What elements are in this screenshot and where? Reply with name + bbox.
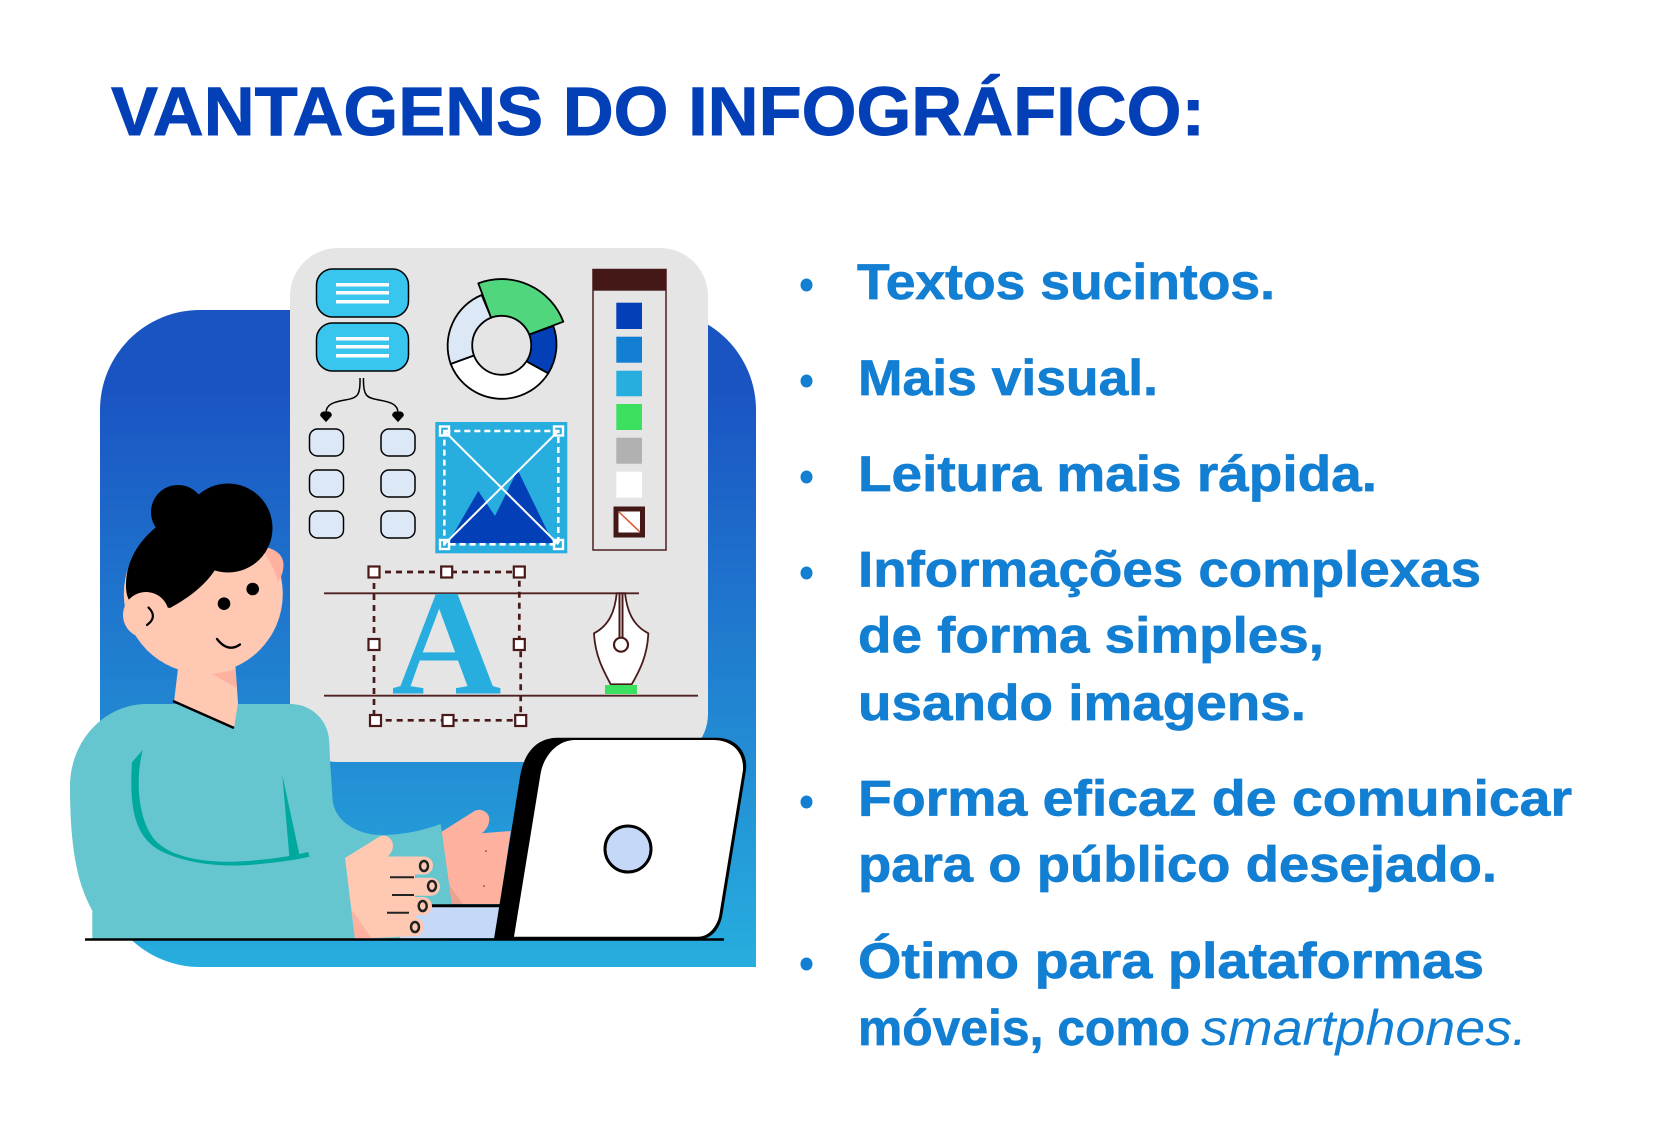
smile xyxy=(217,639,240,648)
item: informacoes complexas: Informações complexas xyxy=(858,542,1481,598)
collar xyxy=(173,701,234,728)
title: VANTAGENS DO INFOGRÁFICO: xyxy=(111,73,1205,150)
flow boxes xyxy=(310,429,415,538)
item: textos sucintos: Textos sucintos. xyxy=(857,254,1275,310)
sweater folds xyxy=(131,750,309,866)
image placeholder xyxy=(435,422,567,553)
item: otimo para plataformas xyxy=(800,933,1527,1056)
item: otimo para plataformas: Ótimo para plataformas xyxy=(858,933,1484,989)
text cards xyxy=(316,269,408,371)
item: mais visual: Mais visual. xyxy=(858,350,1158,406)
left hand xyxy=(345,836,436,939)
item: informacoes complexas xyxy=(800,542,1481,731)
sweater xyxy=(70,704,452,939)
selection box xyxy=(368,566,526,726)
item: informacoes complexas: usando imagens. xyxy=(858,675,1306,731)
right hand xyxy=(442,810,511,904)
face xyxy=(124,514,283,674)
hair xyxy=(126,484,272,608)
colour palette xyxy=(593,269,666,550)
typography guide lines xyxy=(324,593,698,696)
neck shadow xyxy=(212,670,237,688)
list of advantages xyxy=(800,254,1572,1056)
keyboard xyxy=(400,906,500,938)
laptop logo xyxy=(605,826,651,872)
illustration: designer at laptop xyxy=(70,248,756,967)
laptop xyxy=(494,738,746,939)
eyes xyxy=(218,583,259,610)
finger lines xyxy=(387,877,414,913)
item: forma eficaz: Forma eficaz de comunicar xyxy=(858,771,1572,827)
item: forma eficaz: para o público desejado. xyxy=(858,837,1497,893)
blue gradient background xyxy=(100,310,756,967)
table line xyxy=(85,938,724,941)
back ear xyxy=(259,546,284,582)
pen tool icon xyxy=(594,593,648,694)
ear xyxy=(123,592,169,638)
item: otimo para plataformas: móveis, como xyxy=(858,1000,1190,1056)
item: otimo para plataformas: smartphones. xyxy=(1201,1000,1527,1056)
item: informacoes complexas: de forma simples, xyxy=(858,608,1324,664)
panel: design board xyxy=(290,248,708,762)
flow arrows xyxy=(321,378,403,421)
neck and head xyxy=(123,484,284,728)
item: leitura mais rapida: Leitura mais rápida. xyxy=(858,446,1377,502)
neck xyxy=(174,660,238,728)
donut chart xyxy=(448,279,563,399)
letter A: A xyxy=(392,558,502,726)
item: forma eficaz xyxy=(800,771,1572,893)
fingernails xyxy=(411,861,436,932)
